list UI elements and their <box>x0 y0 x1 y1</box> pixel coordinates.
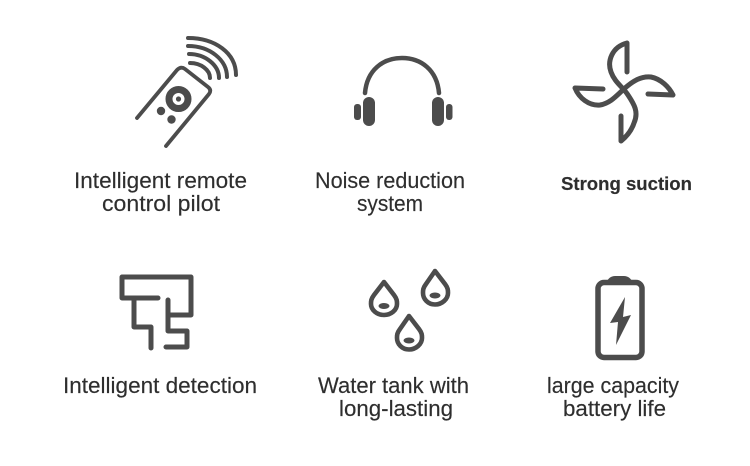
label: large capacity battery life: large capacity <box>547 373 679 398</box>
icon: maze detection <box>122 277 191 348</box>
icon: remote control <box>137 38 236 146</box>
label: large capacity battery life: battery life <box>563 396 666 421</box>
label: water tank with long-lasting: Water tank with <box>318 373 469 398</box>
label: intelligent remote control pilot <box>74 168 247 216</box>
label: noise reduction system <box>315 168 465 216</box>
label: noise reduction system: Noise reduction <box>315 168 465 193</box>
label: water tank with long-lasting: long-lasting <box>339 396 453 421</box>
label: strong suction: Strong suction <box>561 174 692 194</box>
icon: headphones <box>354 58 452 126</box>
label: noise reduction system: system <box>357 191 423 216</box>
label: water tank with long-lasting <box>318 373 469 421</box>
label: intelligent remote control pilot: control pilot <box>102 191 220 216</box>
icon: fan blades <box>575 43 673 141</box>
label: intelligent remote control pilot: Intelligent remote <box>74 168 247 193</box>
icon: water drops <box>371 271 448 350</box>
label: large capacity battery life <box>547 373 679 421</box>
label: intelligent detection: Intelligent detection <box>63 373 257 398</box>
icon: battery <box>598 276 642 358</box>
